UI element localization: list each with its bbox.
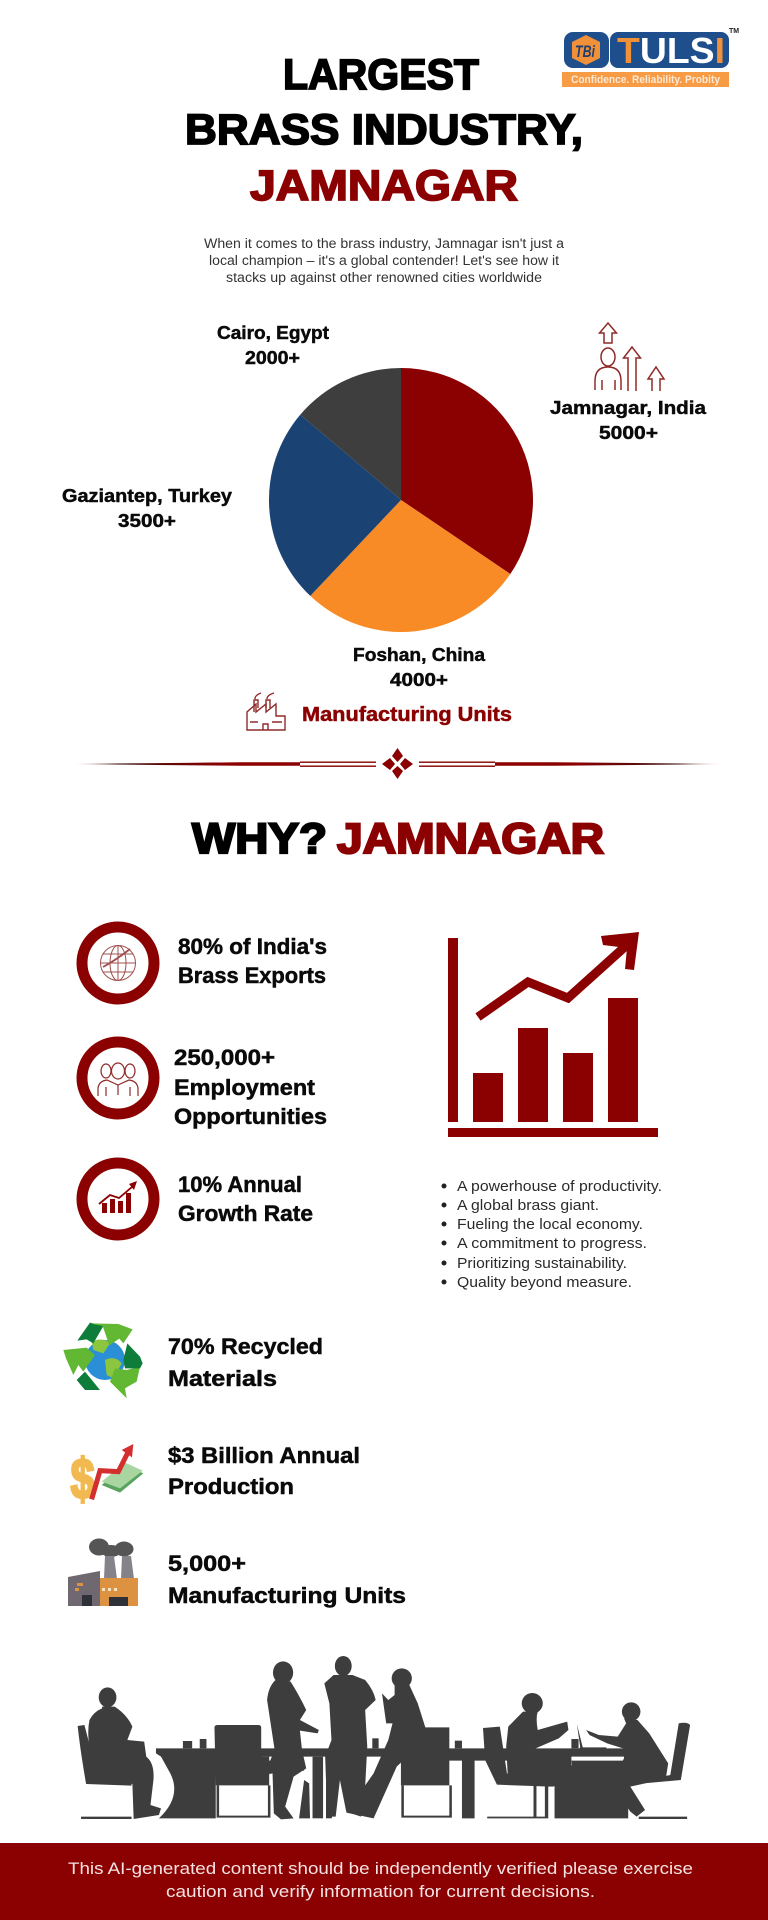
legend caption: Manufacturing Units — [302, 704, 512, 726]
stat: employment: Employment — [174, 1075, 316, 1100]
bars — [473, 998, 638, 1122]
logo: Tulsi — [562, 28, 739, 87]
illustration: business meeting silhouettes — [78, 1656, 690, 1819]
slice: Foshan — [310, 500, 510, 632]
stat: manufacturing units: 5,000+ — [168, 1551, 246, 1576]
title: JAMNAGAR — [250, 162, 518, 210]
label: Foshan: Foshan, China — [353, 645, 486, 665]
trend arrow — [478, 932, 639, 1017]
footer banner: caution and verify information for current decisions. — [166, 1882, 595, 1901]
intro paragraph: stacks up against other renowned cities worldwide — [226, 270, 542, 285]
label: Cairo: 2000+ — [245, 348, 300, 368]
icon: dollar and money with red arrow — [71, 1444, 143, 1511]
icon: dollar and money with red arrow: $ — [71, 1448, 95, 1511]
icon: factory with smoke — [68, 1538, 138, 1606]
bullet list: A powerhouse of productivity. — [457, 1178, 662, 1195]
stat: annual production: Production — [168, 1474, 294, 1499]
stat: recycled materials: 70% Recycled — [168, 1334, 323, 1359]
stat: manufacturing units: Manufacturing Units — [168, 1583, 406, 1608]
bullet list: Prioritizing sustainability. — [457, 1255, 627, 1272]
icon: person with growth arrows — [595, 323, 664, 391]
intro paragraph: When it comes to the brass industry, Jamnagar isn't just a — [204, 236, 565, 251]
slice: Cairo — [300, 368, 401, 500]
slice: Jamnagar — [401, 368, 533, 574]
chart icon: rising bars with arrow — [448, 932, 658, 1137]
label: Gaziantep: Gaziantep, Turkey — [62, 486, 232, 506]
footer banner — [0, 1843, 768, 1920]
title: BRASS INDUSTRY, — [185, 106, 583, 154]
bullet list: Quality beyond measure. — [457, 1274, 632, 1291]
title — [185, 51, 583, 210]
stat: employment: 250,000+ — [174, 1045, 275, 1070]
stat: annual production — [168, 1443, 360, 1499]
label: Cairo — [217, 323, 329, 368]
section divider ornament — [71, 748, 725, 779]
pie chart: manufacturing units by city — [269, 368, 533, 632]
icon: recycling globe — [63, 1323, 143, 1398]
icon: growth bars in ring — [82, 1163, 154, 1235]
stat: growth rate: Growth Rate — [178, 1201, 313, 1226]
slice: Gaziantep — [269, 415, 401, 596]
stat: growth rate — [82, 1163, 313, 1235]
bullet list: A commitment to progress. — [457, 1235, 647, 1252]
logo: Tulsi: TM — [729, 28, 739, 35]
label: Cairo: Cairo, Egypt — [217, 323, 329, 343]
label: Jamnagar: 5000+ — [599, 423, 658, 443]
label: Jamnagar: Jamnagar, India — [550, 398, 707, 418]
stat: annual production: $3 Billion Annual — [168, 1443, 360, 1468]
logo: Tulsi: TBi — [575, 42, 596, 61]
title: LARGEST — [283, 51, 479, 99]
icon: team in ring — [82, 1042, 154, 1114]
label: Foshan: 4000+ — [390, 670, 448, 690]
label: Foshan — [353, 645, 486, 690]
stat: employment: Opportunities — [174, 1104, 327, 1129]
label: Gaziantep: 3500+ — [118, 511, 176, 531]
stat: recycled materials: Materials — [168, 1366, 277, 1391]
bullet list — [442, 1178, 662, 1291]
icon: factory outline — [247, 693, 285, 730]
icon: globe in ring — [82, 927, 154, 999]
logo: Tulsi: Confidence. Reliability. Probity — [571, 74, 721, 86]
bullet list: Fueling the local economy. — [457, 1216, 643, 1233]
heading: Why Jamnagar: WHY? — [192, 815, 327, 863]
stat: growth rate: 10% Annual — [178, 1172, 302, 1197]
stat: 80% exports: Brass Exports — [178, 963, 326, 988]
label: Jamnagar — [550, 398, 707, 443]
heading: Why Jamnagar — [192, 815, 604, 863]
logo: Tulsi: TULSI — [617, 30, 725, 71]
stat: recycled materials — [168, 1334, 323, 1391]
stat: manufacturing units — [168, 1551, 406, 1608]
label: Gaziantep — [62, 486, 232, 531]
stat: employment — [82, 1042, 327, 1129]
stat: 80% exports: 80% of India's — [178, 934, 327, 959]
bullet list: A global brass giant. — [457, 1197, 599, 1214]
stat: 80% exports — [82, 927, 327, 999]
intro paragraph: local champion – it's a global contender! Let's see how it — [209, 253, 559, 268]
footer banner: This AI-generated content should be independently verified please exercise — [68, 1859, 693, 1878]
intro paragraph — [204, 236, 565, 285]
axes — [448, 938, 658, 1137]
heading: Why Jamnagar: JAMNAGAR — [337, 815, 604, 863]
